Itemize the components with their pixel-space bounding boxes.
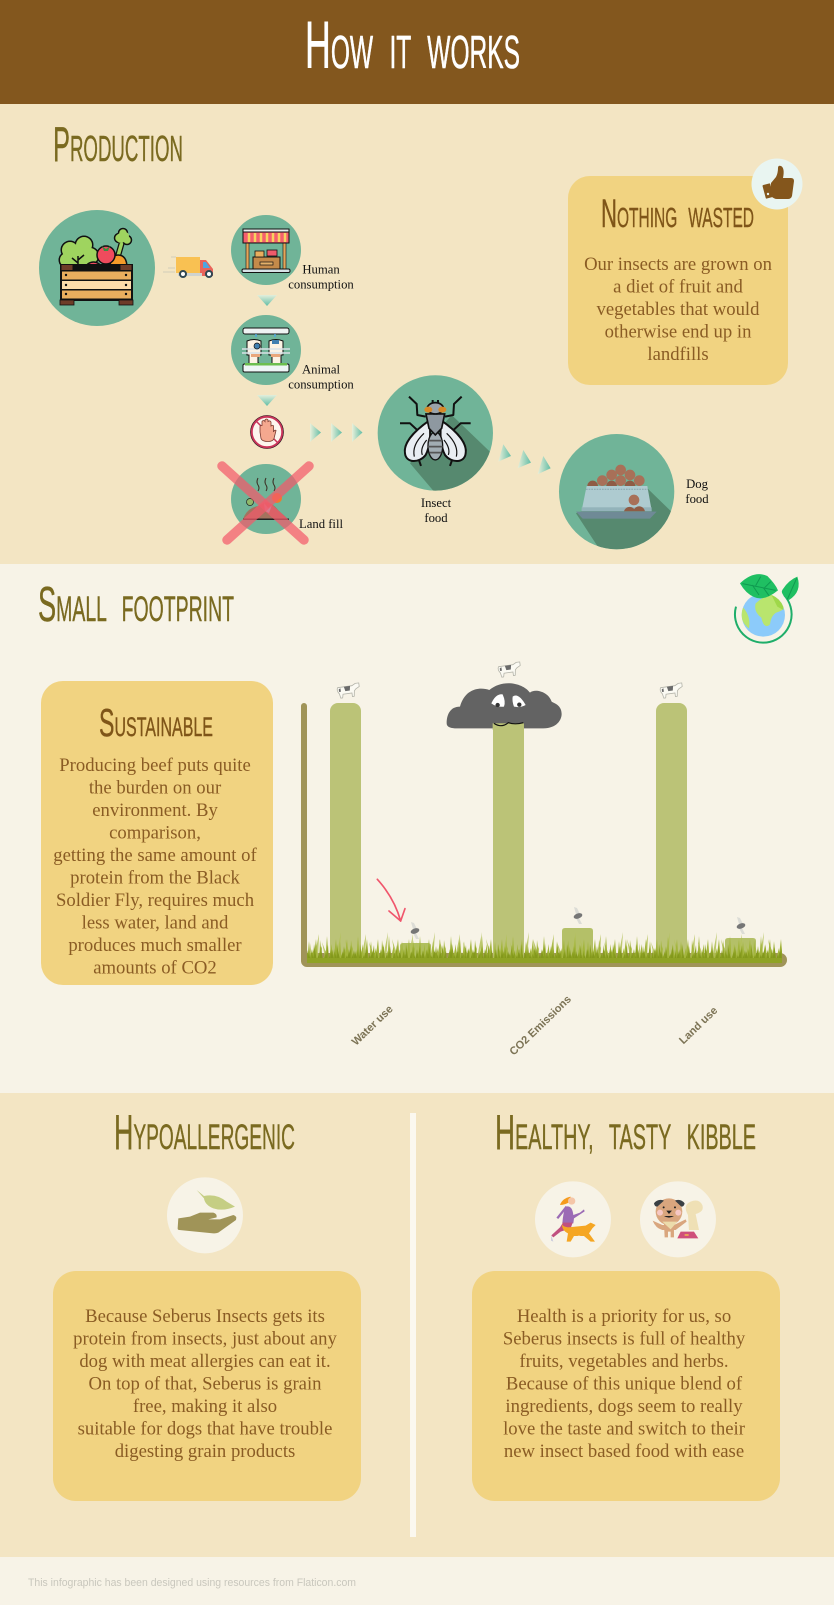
body text: Seberus insects is full of healthy bbox=[503, 1328, 746, 1350]
body text: love the taste and switch to their bbox=[503, 1418, 746, 1440]
body text: dog with meat allergies can eat it. bbox=[79, 1351, 331, 1372]
body text: Because Seberus Insects gets its bbox=[85, 1306, 325, 1327]
icon: hand with leaf bbox=[167, 1177, 243, 1253]
icon: cow 2 bbox=[498, 662, 521, 677]
panel: production bbox=[39, 118, 802, 560]
panel: small footprint bbox=[38, 574, 799, 1058]
axes bbox=[301, 703, 787, 967]
icon: stop hand bbox=[250, 416, 284, 448]
icon: runner with dog bbox=[535, 1181, 611, 1257]
panel: hypoallergenic bbox=[53, 1106, 361, 1501]
icon: fly 3 bbox=[736, 917, 746, 934]
label: human consumption: consumption bbox=[288, 278, 354, 292]
label: animal consumption: consumption bbox=[288, 378, 354, 392]
icon: globe with leaves bbox=[735, 574, 799, 643]
body text: less water, land and bbox=[82, 912, 229, 934]
label: dog food: food bbox=[685, 492, 709, 506]
icon: fly 2 bbox=[573, 907, 583, 924]
body text: protein from the Black bbox=[70, 868, 240, 888]
icon: thumbs up bbox=[752, 158, 802, 210]
icon: fly bbox=[378, 375, 493, 497]
bar: CO2, beef bbox=[493, 718, 524, 958]
bar: water use, insect bbox=[400, 943, 431, 958]
callout: hypoallergenic text bbox=[53, 1271, 361, 1501]
icon: cow farm bbox=[231, 315, 301, 385]
body text: the burden on our bbox=[89, 778, 222, 798]
body text: Our insects are grown on bbox=[584, 254, 773, 275]
heading: hypoallergenic: HYPOALLERGENIC bbox=[114, 1106, 295, 1160]
label: land fill: Land fill bbox=[299, 517, 343, 531]
arrow: down 2 bbox=[257, 395, 277, 406]
callout: healthy text bbox=[472, 1271, 780, 1501]
label: co2 emissions: CO2 Emissions bbox=[508, 993, 574, 1058]
callout: nothing wasted bbox=[568, 158, 802, 385]
grass bbox=[307, 931, 782, 963]
title: HOW IT WORKS bbox=[305, 8, 520, 83]
cross bbox=[222, 466, 309, 540]
bar: land use, beef bbox=[656, 703, 687, 958]
icon: cow 3 bbox=[660, 683, 683, 698]
icon: puppy with bone and bowl bbox=[640, 1181, 716, 1257]
label: land use: Land use bbox=[677, 1005, 720, 1047]
header banner bbox=[0, 0, 834, 104]
bar: land use, insect bbox=[725, 938, 756, 958]
body text: Health is a priority for us, so bbox=[517, 1306, 731, 1327]
body text: Soldier Fly, requires much bbox=[56, 890, 255, 911]
label: dog food: Dog bbox=[686, 477, 709, 491]
body text: Because of this unique blend of bbox=[506, 1374, 743, 1394]
arrow: red pointer bbox=[377, 879, 405, 921]
label: water use: Water use bbox=[350, 1003, 396, 1048]
arrow: down 1 bbox=[257, 295, 277, 306]
body text: On top of that, Seberus is grain bbox=[88, 1374, 322, 1394]
icon: market stall bbox=[231, 215, 301, 285]
arrows: diagonal bbox=[498, 444, 551, 474]
icon: truck bbox=[163, 257, 213, 277]
divider bbox=[410, 1113, 416, 1537]
label: insect food: food bbox=[424, 511, 448, 525]
body text: produces much smaller bbox=[68, 935, 242, 956]
bar: water use, beef bbox=[330, 703, 361, 958]
icon: dog food bowl bbox=[558, 434, 674, 550]
bar: CO2, insect bbox=[562, 928, 593, 958]
footer credit: This infographic has been designed using resources from Flaticon.com bbox=[28, 1577, 356, 1589]
label: animal consumption: Animal bbox=[302, 362, 341, 376]
body text: suitable for dogs that have trouble bbox=[78, 1418, 332, 1440]
body text: a diet of fruit and bbox=[613, 276, 744, 298]
icon: vegetable crate bbox=[39, 210, 155, 326]
body text: amounts of CO2 bbox=[93, 958, 217, 978]
label: farm: Farm bbox=[253, 360, 280, 374]
icon: cow 1 bbox=[337, 683, 360, 698]
heading: small footprint: SMALL FOOTPRINT bbox=[38, 578, 234, 632]
heading: production: PRODUCTION bbox=[53, 118, 183, 172]
body text: otherwise end up in bbox=[605, 322, 752, 342]
callout: sustainable bbox=[41, 681, 273, 985]
body text: digesting grain products bbox=[115, 1441, 295, 1462]
body text: free, making it also bbox=[133, 1396, 277, 1417]
body text: protein from insects, just about any bbox=[73, 1328, 337, 1350]
arrows: right bbox=[310, 423, 362, 442]
body text: vegetables that would bbox=[597, 299, 760, 320]
bar chart bbox=[301, 662, 787, 967]
label: human consumption: Human bbox=[302, 262, 340, 276]
panel: healthy, tasty kibble bbox=[472, 1106, 780, 1501]
icon: fly 1 bbox=[410, 922, 420, 939]
body text: new insect based food with ease bbox=[504, 1441, 744, 1462]
icon: land fill with cross bbox=[222, 464, 309, 540]
icon: cloud bbox=[447, 683, 562, 730]
body text: Producing beef puts quite bbox=[59, 755, 251, 776]
body text: getting the same amount of bbox=[53, 845, 257, 866]
body text: comparison, bbox=[109, 822, 201, 844]
label: insect food: Insect bbox=[421, 496, 452, 510]
body text: environment. By bbox=[92, 800, 218, 821]
body text: ingredients, dogs seem to really bbox=[505, 1396, 743, 1417]
heading: sustainable: SUSTAINABLE bbox=[99, 702, 213, 745]
body text: landfills bbox=[647, 344, 709, 365]
body text: fruits, vegetables and herbs. bbox=[519, 1351, 729, 1372]
